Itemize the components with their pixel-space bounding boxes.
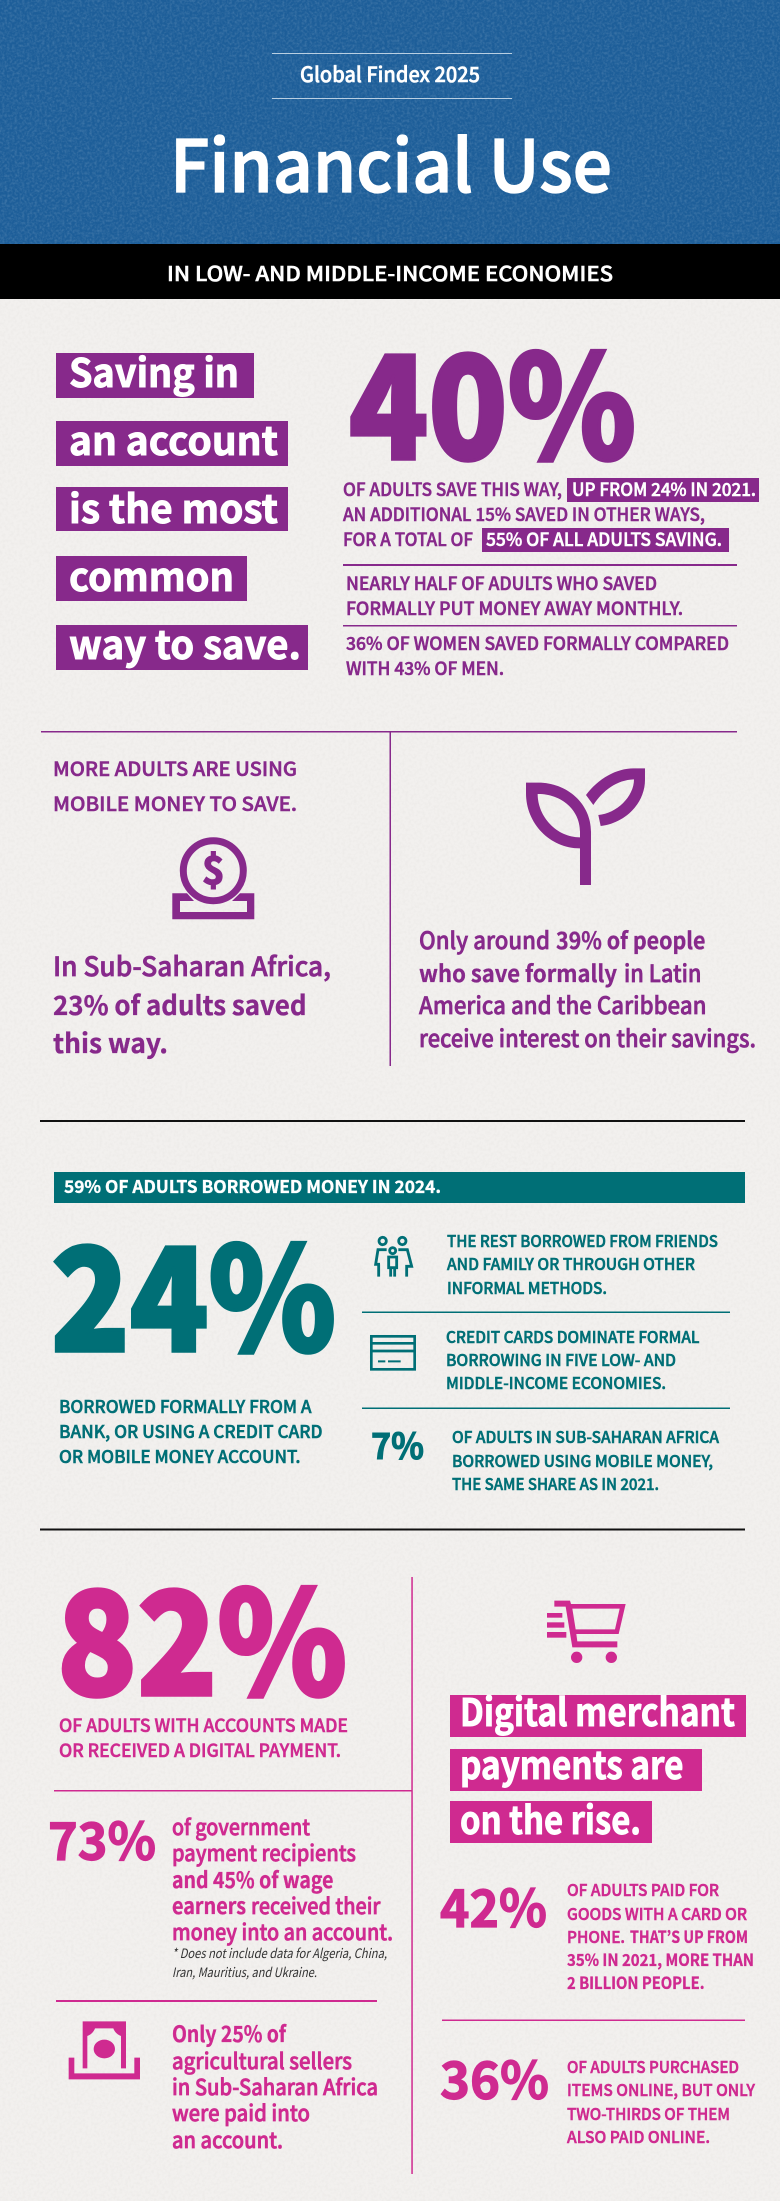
icon: credit card [371, 1336, 415, 1369]
icon: coin deposit: $ [202, 840, 225, 895]
big number 82%: 82% [57, 1530, 347, 1737]
saving stats text [343, 476, 759, 681]
online purchases text: TWO-THIRDS OF THEM [567, 2101, 730, 2125]
online purchases text: ITEMS ONLINE, BUT ONLY [567, 2077, 756, 2101]
panel: merchant payments headline: Digital merchant [460, 1682, 735, 1737]
borrowed formally text [59, 1394, 322, 1469]
header banner [0, 0, 780, 244]
card or phone text: GOODS WITH A CARD OR [567, 1901, 747, 1925]
saving stats text: UP FROM 24% IN 2021. [572, 476, 756, 502]
interest text: 39% of people [556, 922, 706, 956]
big number 40%: 40% [349, 294, 636, 501]
mobile money heading: MOBILE MONEY TO SAVE. [53, 788, 297, 817]
informal borrowing text: INFORMAL METHODS. [447, 1275, 607, 1299]
government recipients text: payment recipients [172, 1836, 356, 1868]
panel: saving headline: an account [69, 411, 278, 467]
digital payment text: OF ADULTS WITH ACCOUNTS MADE [59, 1712, 348, 1738]
credit cards text [446, 1324, 700, 1394]
online purchases text: ALSO PAID ONLINE. [567, 2124, 710, 2148]
card or phone text: PHONE. [567, 1924, 625, 1948]
footnote: * Does not include data for Algeria, China, [172, 1943, 387, 1962]
icon: shopping cart [547, 1601, 626, 1663]
title: Financial Use [170, 108, 612, 213]
agricultural sellers text: in Sub-Saharan Africa [172, 2070, 378, 2102]
interest text: who save formally [419, 955, 617, 989]
stat 73%: 73% [48, 1800, 156, 1875]
stat 7%: 7% [371, 1418, 424, 1470]
interest text: receive interest on their savings. [419, 1020, 756, 1054]
mobile money text: this way. [53, 1022, 168, 1061]
mobile money heading: MORE ADULTS ARE USING [53, 753, 297, 782]
agricultural sellers text: were paid into [172, 2096, 310, 2128]
agricultural sellers text: agricultural sellers [172, 2044, 352, 2076]
panel: saving headline: common [69, 547, 234, 603]
borrowed formally text: OR MOBILE MONEY ACCOUNT. [59, 1444, 300, 1469]
informal borrowing text: THE REST BORROWED FROM FRIENDS [447, 1228, 718, 1252]
credit cards text: MIDDLE-INCOME ECONOMIES. [446, 1370, 666, 1394]
mobile money borrowing text: BORROWED USING MOBILE MONEY, [452, 1448, 713, 1472]
panel: saving headline: way to save. [69, 615, 301, 671]
icon: sprout [526, 768, 645, 885]
black strip [0, 244, 780, 299]
borrowed formally text: BANK, OR USING A CREDIT CARD [59, 1419, 322, 1444]
footnote: Iran, Mauritius, and Ukraine. [172, 1962, 317, 1981]
saving stats text: FOR A TOTAL OF [343, 526, 473, 552]
government recipients text: of government [172, 1810, 310, 1842]
agricultural sellers text: an account. [172, 2123, 283, 2155]
informal borrowing text: AND FAMILY OR THROUGH OTHER [447, 1251, 695, 1275]
card or phone text: 2 BILLION PEOPLE. [567, 1970, 704, 1994]
government recipients text: earners [172, 1889, 246, 1921]
interest text: Only around [419, 922, 550, 956]
interest text [419, 922, 756, 1054]
card or phone text: THAT’S UP FROM [630, 1924, 748, 1948]
government recipients text: received their [251, 1889, 381, 1921]
credit cards text: BORROWING IN FIVE LOW- AND [446, 1347, 676, 1371]
borrowed formally text: BORROWED FORMALLY FROM A [59, 1394, 312, 1419]
government recipients text: money into an account. [172, 1915, 393, 1947]
informal borrowing text [447, 1228, 718, 1299]
mobile money text [53, 945, 331, 1061]
mobile money borrowing text: OF ADULTS IN SUB-SAHARAN AFRICA [452, 1424, 719, 1448]
saving stats text: NEARLY HALF OF ADULTS WHO SAVED [346, 570, 657, 596]
digital payment text [59, 1712, 348, 1763]
online purchases text [567, 2054, 756, 2148]
borrowing banner [54, 1172, 745, 1203]
mobile money text: 23% of adults saved [53, 984, 306, 1023]
interest text: in Latin [624, 955, 702, 989]
stat 42%: 42% [440, 1867, 547, 1942]
panel: saving headline: Saving in [69, 343, 239, 399]
saving stats text: WITH 43% OF MEN. [346, 655, 504, 681]
icon: money into account [69, 2021, 140, 2079]
footnote [172, 1943, 387, 1981]
big number 24%: 24% [51, 1186, 336, 1393]
saving stats text: FORMALLY PUT MONEY AWAY MONTHLY. [346, 595, 683, 621]
card or phone text: OF ADULTS PAID FOR [567, 1877, 719, 1901]
subtitle: Global Findex 2025 [300, 59, 480, 89]
saving stats text: AN ADDITIONAL 15% SAVED IN OTHER WAYS, [343, 501, 705, 527]
government recipients text: and 45% of wage [172, 1863, 334, 1895]
card or phone text [567, 1877, 754, 1994]
online purchases text: OF ADULTS PURCHASED [567, 2054, 739, 2078]
panel: merchant payments headline: payments are [460, 1735, 684, 1790]
digital payment text: OR RECEIVED A DIGITAL PAYMENT. [59, 1737, 341, 1763]
government recipients text [172, 1810, 393, 1947]
mobile money text: In Sub-Saharan Africa, [53, 945, 331, 984]
panel: saving headline: is the most [69, 479, 278, 535]
saving stats text: 36% OF WOMEN SAVED FORMALLY COMPARED [346, 630, 729, 656]
card or phone text: 35% IN 2021, MORE THAN [567, 1947, 754, 1971]
panel: merchant payments headline [450, 1682, 746, 1845]
agricultural sellers text: Only 25% of [172, 2017, 287, 2049]
panel: saving headline [56, 343, 308, 671]
mobile money borrowing text: THE SAME SHARE AS IN 2021. [452, 1471, 659, 1495]
panel: merchant payments headline: on the rise. [460, 1790, 641, 1845]
stat 36%: 36% [440, 2039, 549, 2114]
panel frame: mobile money and interest [41, 731, 737, 1066]
saving stats text: 55% OF ALL ADULTS SAVING. [486, 526, 722, 552]
saving stats text: OF ADULTS SAVE THIS WAY, [343, 476, 562, 502]
interest text: America and the Caribbean [419, 987, 706, 1021]
mobile money borrowing text [452, 1424, 719, 1495]
borrowing banner: 59% OF ADULTS BORROWED MONEY IN 2024. [64, 1174, 441, 1199]
credit cards text: CREDIT CARDS DOMINATE FORMAL [446, 1324, 700, 1348]
black strip: IN LOW- AND MIDDLE-INCOME ECONOMIES [167, 257, 613, 287]
mobile money heading [53, 753, 297, 817]
icon: family [376, 1237, 412, 1277]
icon: coin deposit [172, 840, 254, 919]
agricultural sellers text [172, 2017, 378, 2155]
